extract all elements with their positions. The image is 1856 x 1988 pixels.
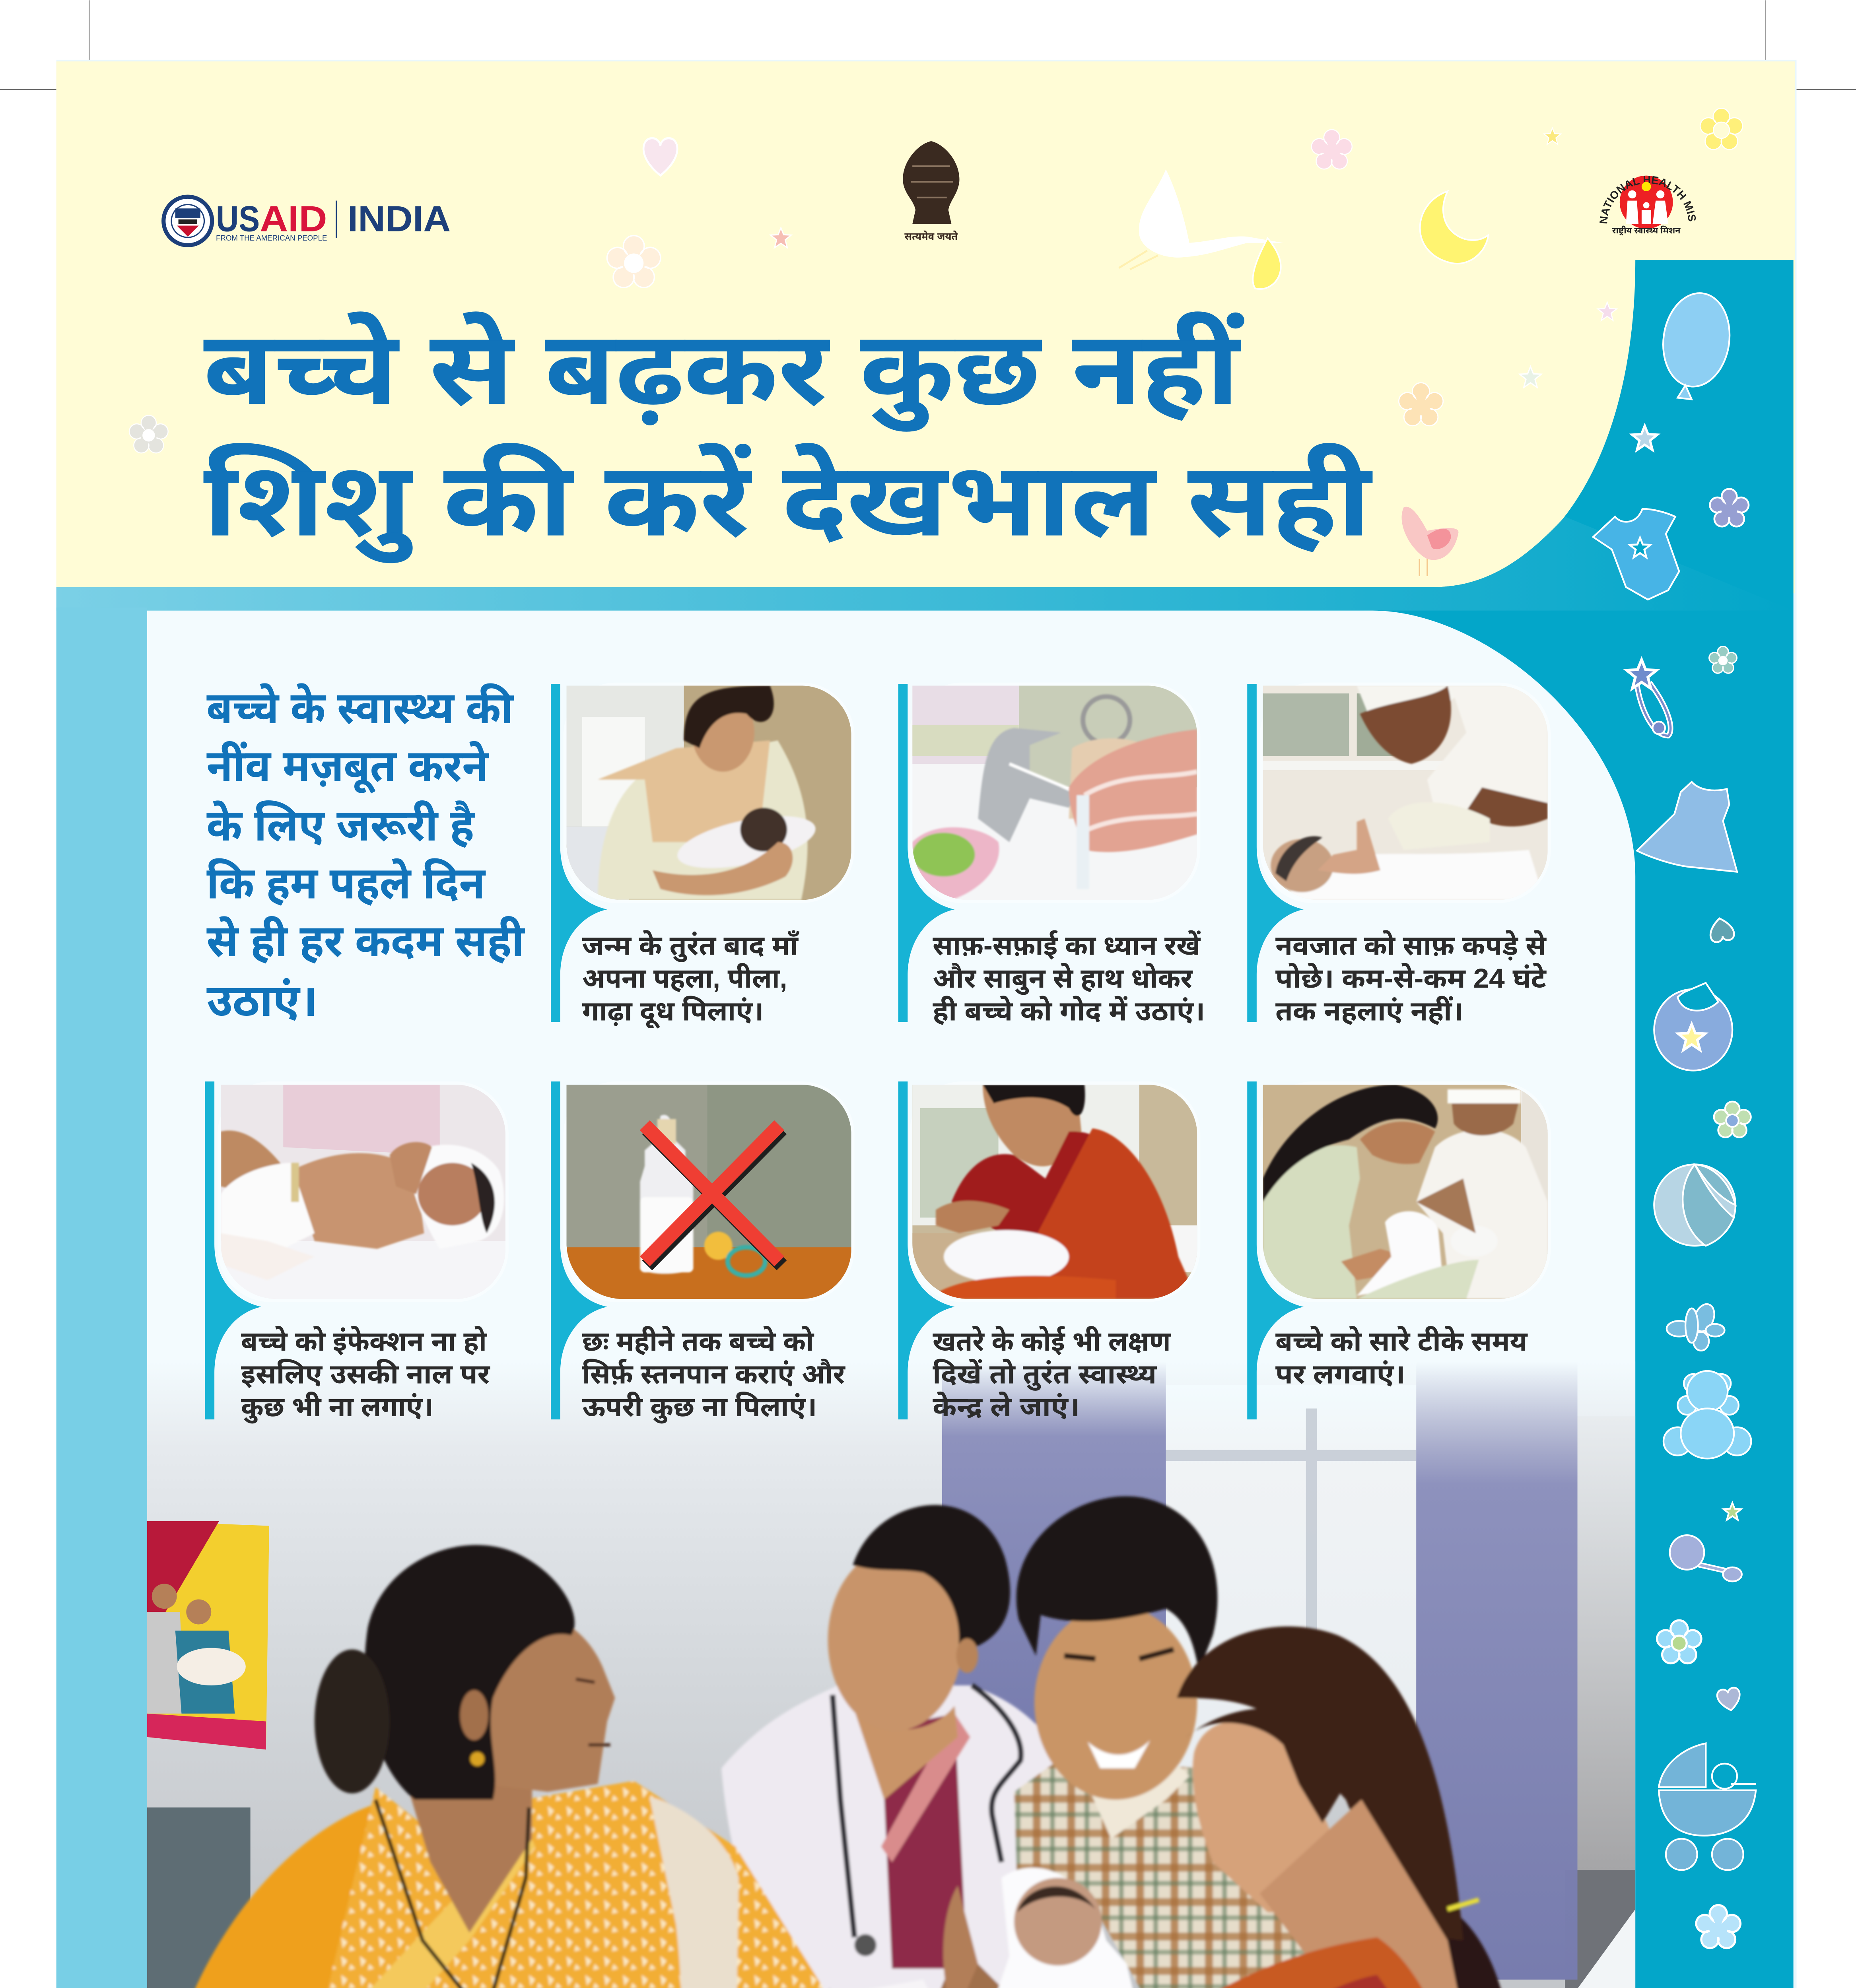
logo: USAID India: FROM THE AMERICAN PEOPLE bbox=[216, 234, 327, 243]
decorative cream motifs bbox=[129, 108, 1743, 453]
card: vaccination: बच्चे को सारे टीके समय bbox=[1275, 1326, 1528, 1357]
card: no bottle feeding: ऊपरी कुछ ना पिलाएं। bbox=[582, 1392, 817, 1424]
card: danger signs: दिखें तो तुरंत स्वास्थ्य bbox=[933, 1359, 1157, 1391]
card: hand washing: ही बच्चे को गोद में उठाएं। bbox=[933, 996, 1205, 1027]
card: no bottle feeding: छः महीने तक बच्चे को bbox=[582, 1326, 814, 1357]
card: drying newborn: तक नहलाएं नहीं। bbox=[1275, 996, 1463, 1027]
intro text: कि हम पहले दिन bbox=[206, 858, 486, 908]
icon: rattle bbox=[1670, 1535, 1742, 1581]
icon: flower bbox=[1710, 489, 1749, 526]
icons: right column motifs bbox=[1593, 289, 1756, 1988]
icon: star bbox=[1632, 426, 1658, 450]
intro text: उठाएं। bbox=[206, 975, 318, 1025]
panel: left column bbox=[56, 608, 147, 1988]
icon: dress bbox=[1637, 782, 1737, 872]
icon: balloon bbox=[1657, 289, 1736, 399]
person: newborn bbox=[943, 1868, 1164, 1988]
card: vaccination bbox=[1247, 1081, 1551, 1419]
intro text: से ही हर कदम सही bbox=[206, 916, 525, 966]
card: drying newborn: नवजात को साफ़ कपड़े से bbox=[1275, 930, 1547, 961]
icon: pale flower bbox=[1696, 1905, 1740, 1948]
icon: green star bbox=[1724, 1503, 1741, 1520]
icon: teddy bear bbox=[1664, 1371, 1751, 1458]
icon: green flower bbox=[1714, 1102, 1751, 1138]
card: breastfeeding: गाढ़ा दूध पिलाएं। bbox=[582, 996, 764, 1029]
person: doctor bbox=[721, 1505, 1064, 1988]
person: father bbox=[1014, 1496, 1318, 1988]
card: danger signs: केन्द्र ले जाएं। bbox=[933, 1391, 1080, 1422]
card: no bottle feeding: सिर्फ़ स्तनपान कराएं और bbox=[582, 1359, 846, 1390]
card: drying newborn: पोछे। कम-से-कम 24 घंटे bbox=[1275, 963, 1547, 994]
icon: ball bbox=[1654, 1165, 1736, 1246]
card: umbilical cord: कुछ भी ना लगाएं। bbox=[241, 1392, 433, 1424]
intro text: नींव मज़बूत करने bbox=[206, 741, 489, 794]
card: no bottle feeding bbox=[551, 1081, 855, 1424]
intro text: बच्चे के स्वास्थ्य की bbox=[206, 683, 514, 733]
card: hand washing: साफ़-सफ़ाई का ध्यान रखें bbox=[933, 930, 1201, 961]
card: hand washing: और साबुन से हाथ धोकर bbox=[933, 963, 1193, 995]
panel: gradient band bbox=[56, 516, 1794, 611]
card: drying newborn bbox=[1247, 683, 1551, 1027]
card: vaccination: पर लगवाएं। bbox=[1275, 1359, 1405, 1390]
card: danger signs: खतरे के कोई भी लक्षण bbox=[933, 1326, 1171, 1357]
logo: National Health Mission: राष्ट्रीय स्वास्थ्य मिशन bbox=[1612, 225, 1681, 236]
card: breastfeeding bbox=[551, 683, 855, 1029]
card: breastfeeding: जन्म के तुरंत बाद माँ bbox=[582, 930, 800, 962]
logo: USAID India: AID bbox=[260, 199, 327, 239]
icon: safety pin bbox=[1627, 660, 1671, 736]
intro text bbox=[206, 683, 525, 1025]
icon: blue flower bbox=[1657, 1620, 1701, 1663]
icon: butterfly bbox=[1667, 1301, 1724, 1351]
person: grandmother bbox=[163, 1545, 1025, 1988]
card: danger signs bbox=[898, 1081, 1200, 1422]
card: hand washing bbox=[898, 683, 1205, 1027]
logo: USAID India: INDIA bbox=[348, 199, 451, 239]
card: breastfeeding: अपना पहला, पीला, bbox=[582, 963, 787, 994]
person: mother bbox=[1141, 1627, 1511, 1988]
icon: bib bbox=[1654, 983, 1732, 1070]
logo: national emblem bbox=[903, 141, 959, 242]
title: बच्चे से बढ़कर कुछ नहीं bbox=[204, 311, 1245, 433]
icon: bird bbox=[1402, 507, 1458, 576]
logo: USAID India bbox=[163, 197, 451, 245]
panel: cream header bbox=[56, 61, 1795, 593]
icon: pram bbox=[1659, 1743, 1756, 1870]
icon: small flower bbox=[1709, 646, 1737, 673]
intro text: के लिए जरूरी है bbox=[206, 800, 475, 850]
icon: onesie bbox=[1593, 509, 1679, 600]
icon: moon bbox=[1420, 191, 1488, 264]
panel: white content area bbox=[147, 611, 1635, 1988]
wall poster bbox=[147, 1521, 269, 1749]
card: umbilical cord: इसलिए उसकी नाल पर bbox=[241, 1359, 490, 1390]
title bbox=[204, 311, 1373, 565]
icon: stork with bundle bbox=[1119, 169, 1283, 289]
icon: heart bbox=[1708, 916, 1735, 943]
logo: USAID India: US bbox=[216, 199, 260, 239]
icon: lilac heart bbox=[1716, 1687, 1742, 1712]
card: umbilical cord bbox=[205, 1081, 509, 1424]
logo: national emblem: सत्यमेव जयते bbox=[904, 231, 958, 242]
title: शिशु की करें देखभाल सही bbox=[204, 442, 1373, 565]
main family photo bbox=[147, 1361, 1635, 1988]
card: umbilical cord: बच्चे को इंफेक्शन ना हो bbox=[241, 1326, 488, 1357]
